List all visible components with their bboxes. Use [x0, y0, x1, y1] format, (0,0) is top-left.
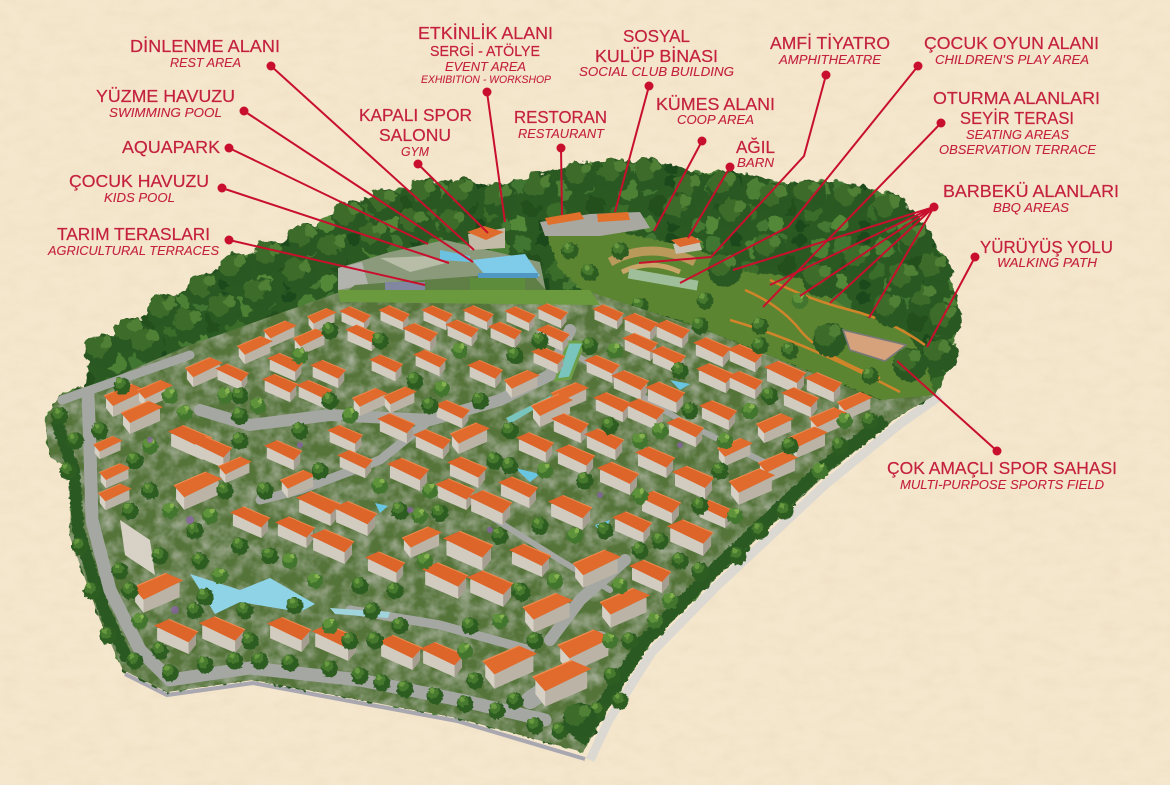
label: kids pool	[69, 171, 209, 205]
label: BBQ areas: BARBEKÜ ALANLARI	[943, 181, 1119, 201]
label: kids pool: KIDS POOL	[104, 191, 175, 205]
label: agricultural terraces	[47, 224, 220, 258]
upper terraced meadow	[545, 232, 935, 405]
line: rest area	[266, 62, 474, 250]
top terrace: restaurant, social club, barn	[540, 212, 702, 254]
label: event area: ETKİNLİK ALANI	[418, 23, 553, 43]
line: children's play area	[680, 62, 922, 283]
village trees	[52, 318, 878, 740]
label: amphitheatre	[770, 33, 890, 67]
lines: BBQ areas	[733, 202, 938, 318]
label: restaurant: RESTORAN	[514, 107, 607, 127]
line: walking path	[927, 252, 980, 347]
label: swimming pool	[96, 86, 235, 120]
forest trees	[85, 158, 962, 372]
houses	[52, 304, 878, 740]
label: kids pool: ÇOCUK HAVUZU	[69, 171, 209, 191]
aerial view of the site	[45, 158, 962, 760]
label: amphitheatre: AMFİ TİYATRO	[770, 33, 890, 53]
label: gym	[359, 105, 472, 159]
village roads	[62, 330, 780, 720]
label: BBQ areas: BBQ AREAS	[993, 201, 1070, 215]
label: restaurant	[514, 107, 607, 141]
label: seating and observation terrace: OBSERVATION TERRACE	[939, 143, 1097, 157]
line: barn	[688, 162, 734, 238]
forest backdrop	[45, 160, 958, 752]
line: aquapark	[224, 144, 428, 244]
village ground	[45, 292, 935, 752]
label: event area	[418, 23, 553, 86]
meadow trees	[562, 233, 927, 384]
label: social club: SOCIAL CLUB BUILDING	[579, 65, 734, 79]
label: event area: EVENT AREA	[445, 60, 526, 74]
label: agricultural terraces: AGRICULTURAL TERRACES	[47, 244, 220, 258]
label: walking path: YÜRÜYÜŞ YOLU	[980, 237, 1113, 257]
garden, amphitheatre and walking paths	[610, 251, 925, 392]
label: social club: KULÜP BİNASI	[595, 46, 718, 66]
line: social club	[615, 82, 654, 212]
label: barn: AĞIL	[736, 136, 775, 157]
label: coop area: KÜMES ALANI	[656, 94, 775, 114]
line: seating areas	[763, 118, 946, 307]
label: gym: KAPALI SPOR	[359, 105, 472, 125]
line: swimming pool	[240, 106, 473, 262]
label: social club	[579, 26, 734, 79]
label: sports field: ÇOK AMAÇLI SPOR SAHASI	[887, 458, 1117, 478]
sports field	[843, 330, 906, 361]
line: gym	[414, 160, 488, 233]
leader lines	[218, 62, 1002, 456]
label: event area: SERGİ - ATÖLYE	[430, 42, 540, 60]
water features and pools	[120, 342, 690, 618]
label: barn: BARN	[737, 156, 775, 170]
label: children's play area	[924, 33, 1099, 67]
flowering shrubs	[147, 437, 683, 614]
label: event area: EXHIBITION - WORKSHOP	[421, 74, 552, 86]
label: gym: SALONU	[379, 125, 451, 145]
label: walking path: WALKING PATH	[997, 256, 1098, 270]
label: walking path	[980, 237, 1113, 270]
label: restaurant: RESTAURANT	[518, 127, 605, 141]
sports hall and aquapark terrace	[338, 226, 546, 296]
site edge walls	[125, 396, 940, 760]
label: sports field	[887, 458, 1117, 492]
label: BBQ areas	[943, 181, 1119, 215]
line: coop area	[654, 136, 706, 231]
label: coop area	[656, 94, 775, 127]
label: aquapark: AQUAPARK	[122, 137, 220, 157]
line: event area	[482, 88, 505, 222]
label: seating and observation terrace: SEYİR TERASI	[960, 108, 1074, 128]
line: amphitheatre	[639, 70, 830, 263]
label: sports field: MULTI-PURPOSE SPORTS FIELD	[900, 478, 1104, 492]
label: swimming pool: SWIMMING POOL	[109, 106, 222, 120]
label: children's play area: ÇOCUK OYUN ALANI	[924, 33, 1099, 53]
upper retaining wall	[338, 290, 600, 305]
label: children's play area: CHILDREN’S PLAY AREA	[935, 53, 1089, 67]
label: amphitheatre: AMPHITHEATRE	[778, 53, 882, 67]
label: gym: GYM	[401, 145, 430, 159]
label: seating and observation terrace: SEATING AREAS	[966, 128, 1070, 142]
label: rest area	[130, 36, 280, 70]
label: swimming pool: YÜZME HAVUZU	[96, 86, 235, 106]
line: restaurant	[556, 144, 566, 215]
label: agricultural terraces: TARIM TERASLARI	[57, 224, 210, 244]
edge hedges	[56, 420, 885, 742]
label: barn	[736, 136, 775, 170]
line: agricultural terraces	[224, 236, 425, 285]
line: kids pool	[218, 184, 449, 263]
line: sports field	[897, 361, 1002, 456]
label: seating and observation terrace: OTURMA ALANLARI	[933, 88, 1100, 108]
label: seating and observation terrace	[933, 88, 1100, 157]
label: coop area: COOP AREA	[677, 113, 754, 127]
label: rest area: REST AREA	[170, 56, 241, 70]
label: rest area: DİNLENME ALANI	[130, 36, 280, 56]
label: social club: SOSYAL	[623, 26, 690, 46]
